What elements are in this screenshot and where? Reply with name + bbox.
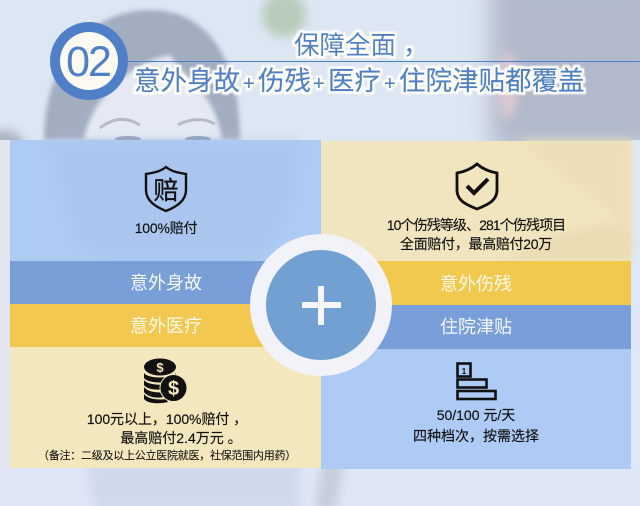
- header rule: [105, 61, 640, 62]
- icon: coins: $: [156, 360, 164, 375]
- icon: coins: $: [168, 378, 179, 400]
- band: hospital allowance: 住院津贴: [440, 317, 512, 337]
- band: accidental death: 意外身故: [130, 273, 202, 293]
- icon: tier steps: 1: [462, 367, 467, 376]
- panel: accidental death: [10, 140, 321, 261]
- band: accidental death: [10, 261, 321, 304]
- title: +: [313, 73, 325, 95]
- text: daily amount: 50/100 元/天: [437, 407, 515, 423]
- title: 保障全面 ，: [294, 32, 429, 60]
- title: 住院津贴都覆盖: [399, 66, 584, 96]
- icon: shield with 赔: 赔: [153, 177, 179, 205]
- title: +: [243, 73, 255, 95]
- text: max payout: 最高赔付2.4万元 。: [120, 430, 242, 446]
- text: disability levels: 10个伤残等级、281个伤残项目: [387, 217, 565, 233]
- text: four tiers: 四种档次，按需选择: [413, 428, 539, 444]
- band: disability: [321, 261, 631, 305]
- icon: shield with 赔: [146, 167, 186, 211]
- text: 100% payout: 100%赔付: [135, 220, 198, 236]
- panel: accidental disability: [321, 141, 631, 261]
- title: 伤残: [258, 66, 311, 96]
- number badge: 02: [66, 38, 110, 86]
- band: disability: 意外伤残: [440, 274, 512, 294]
- icon: tier steps: [458, 364, 496, 399]
- title: [134, 32, 584, 96]
- panel: hospital allowance: [321, 349, 631, 469]
- band: medical: 意外医疗: [130, 316, 202, 336]
- text: note: （备注：二级及以上公立医院就医，社保范围内用药）: [38, 448, 296, 462]
- band: hospital allowance: [321, 305, 631, 349]
- icon: shield with check: [457, 164, 497, 209]
- title: +: [384, 73, 396, 95]
- title: 意外身故: [134, 66, 240, 96]
- panel: medical: [10, 347, 321, 468]
- title: 医疗: [328, 66, 381, 96]
- band: medical: [10, 304, 321, 347]
- number badge: [50, 22, 128, 100]
- text: over 100 yuan: 100元以上，100%赔付 ，: [87, 411, 247, 427]
- plus badge: [250, 234, 392, 376]
- text: full payout: 全面赔付，最高赔付20万: [400, 236, 552, 252]
- icon: coins: [144, 358, 187, 403]
